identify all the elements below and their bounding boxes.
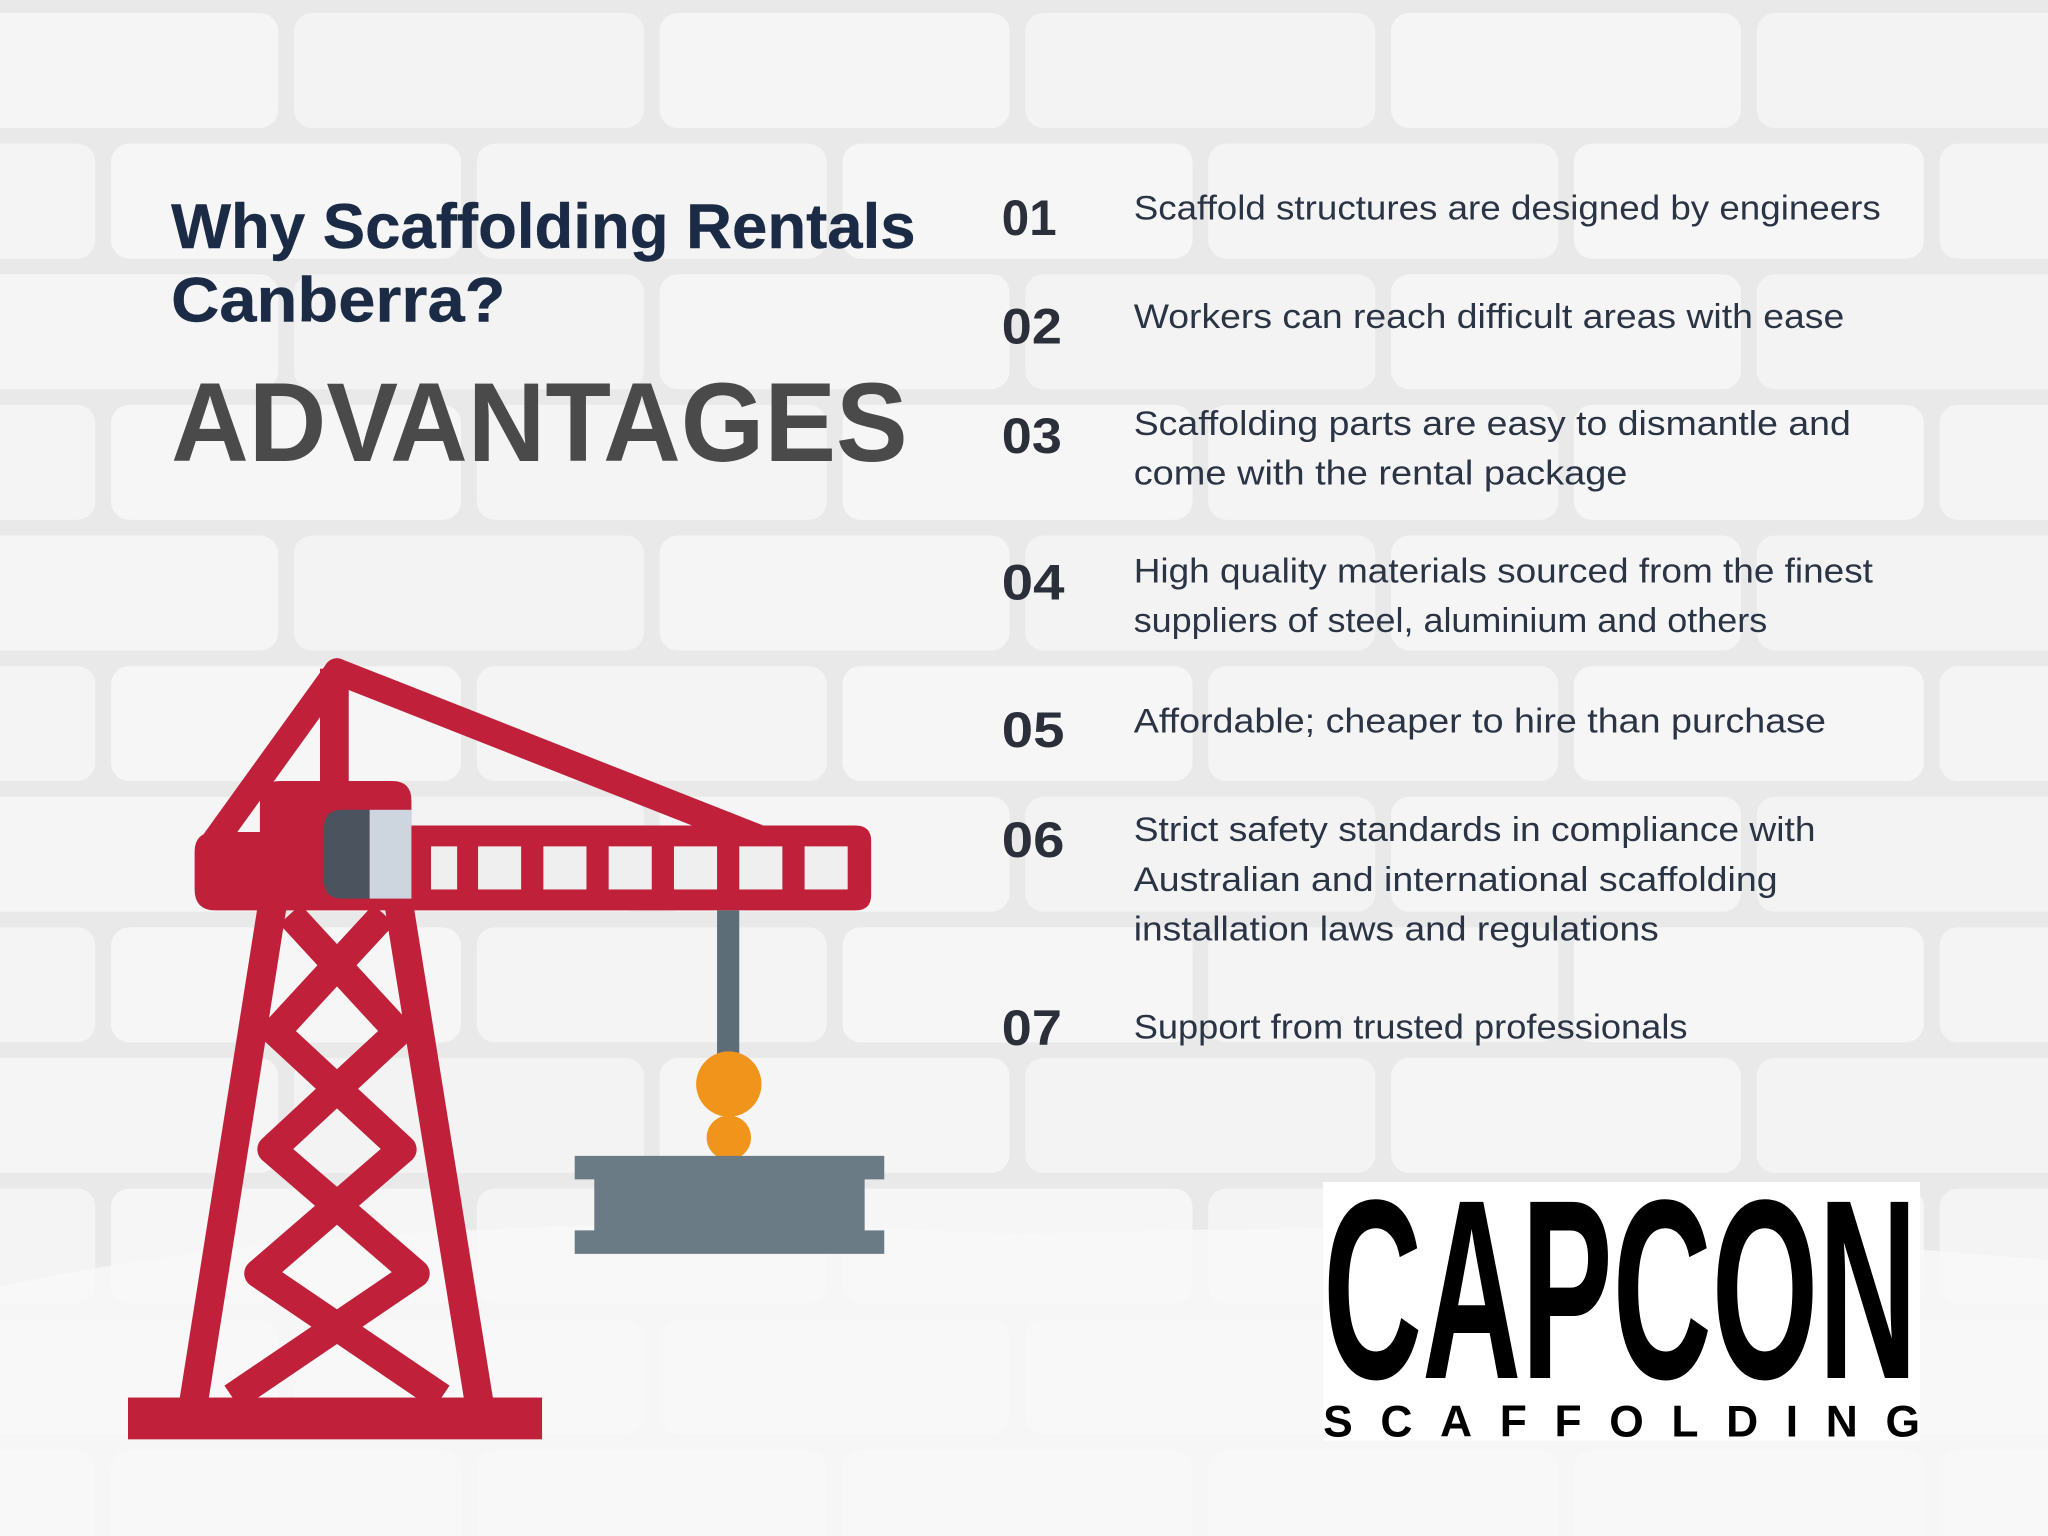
- hook cable and load: [717, 910, 739, 1061]
- item 04: suppliers of steel, aluminium and others: [1134, 602, 1767, 640]
- item 02: Workers can reach difficult areas with ease: [1134, 298, 1844, 336]
- item 02: [1002, 298, 1844, 355]
- item 06: 06: [1002, 812, 1064, 868]
- item 05: 05: [1002, 702, 1064, 758]
- item 06: Australian and international scaffolding: [1134, 861, 1778, 899]
- crane tower: [193, 901, 479, 1404]
- item 07: Support from trusted professionals: [1134, 1008, 1688, 1046]
- item 03: Scaffolding parts are easy to dismantle and: [1134, 405, 1851, 443]
- item 03: 03: [1002, 408, 1062, 464]
- item 05: [1002, 702, 1826, 758]
- item 04: High quality materials sourced from the finest: [1134, 553, 1874, 591]
- item 01: 01: [1002, 190, 1057, 246]
- heading: advantages: ADVANTAGES: [171, 359, 908, 485]
- list of advantages: [1002, 189, 1881, 1056]
- item 05: Affordable; cheaper to hire than purchase: [1134, 703, 1826, 741]
- title: Why Scaffolding Rentals: [171, 192, 916, 262]
- item 03: come with the rental package: [1134, 455, 1627, 493]
- icon: crane: [128, 669, 884, 1439]
- item 01: Scaffold structures are designed by engineers: [1134, 189, 1881, 227]
- crane cab and jib: [195, 781, 871, 910]
- item 04: [1002, 553, 1874, 640]
- title: [171, 192, 916, 335]
- item 03: [1002, 405, 1851, 493]
- item 02: 02: [1002, 299, 1062, 355]
- logo: capcon scaffolding: SCAFFOLDING: [1323, 1398, 1920, 1447]
- item 07: [1002, 1000, 1688, 1056]
- item 06: [1002, 811, 1816, 948]
- title: Canberra?: [171, 265, 505, 335]
- item 06: Strict safety standards in compliance with: [1134, 811, 1816, 849]
- item 07: 07: [1002, 1000, 1062, 1056]
- background: bottom white wave: [0, 1225, 2048, 1536]
- item 06: installation laws and regulations: [1134, 910, 1659, 948]
- item 01: [1002, 189, 1881, 246]
- crane base: [128, 1398, 542, 1439]
- crane stays: [209, 671, 771, 849]
- item 04: 04: [1002, 555, 1065, 611]
